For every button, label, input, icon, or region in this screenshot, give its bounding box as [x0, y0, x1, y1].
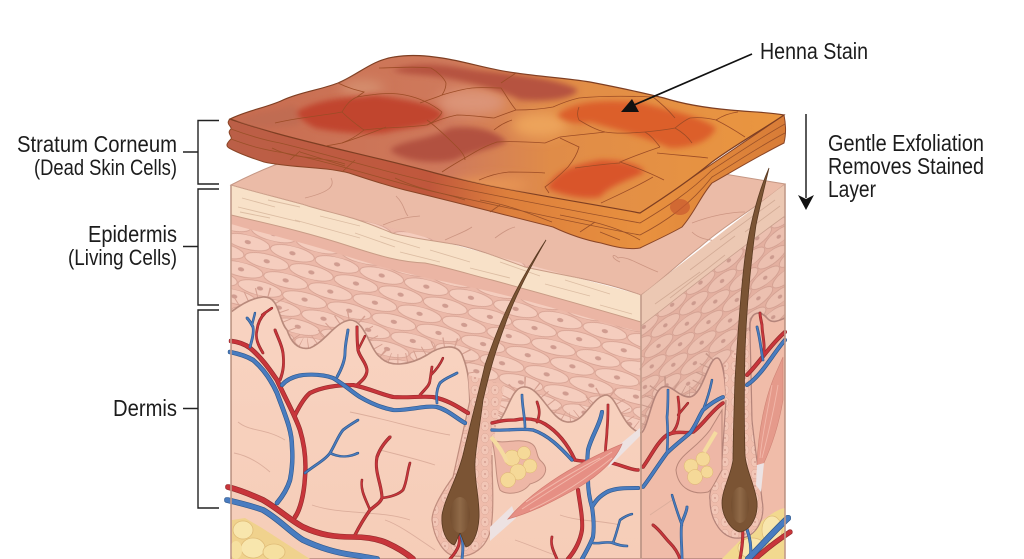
pink band under cream layer [231, 214, 641, 332]
sheet top surface [230, 55, 784, 213]
panel: henna stained stratum corneum sheet [227, 55, 785, 249]
hair shaft and bulb right [722, 168, 769, 532]
sebaceous gland left [491, 437, 546, 493]
cream stratum band [231, 185, 641, 322]
dermis left face [231, 297, 641, 559]
left face: epidermis [232, 186, 640, 432]
arrector muscle left [490, 428, 640, 541]
sheet edge layers [227, 115, 785, 249]
label: stratum corneum [17, 131, 177, 180]
stain blotches [236, 65, 716, 198]
label: gentle exfoliation: Removes Stained [828, 153, 984, 179]
bracket: epidermis [183, 189, 219, 305]
label: gentle exfoliation [828, 130, 984, 202]
red blood vessels [228, 308, 790, 559]
right face: epidermis [641, 185, 784, 432]
right cream band [641, 184, 785, 326]
label: epidermis: (Living Cells) [68, 245, 177, 270]
arrector muscle right [756, 357, 783, 492]
label: gentle exfoliation: Layer [828, 176, 876, 202]
darker edge patch [670, 199, 690, 215]
basal cell row left [231, 297, 641, 433]
label: gentle exfoliation: Gentle Exfoliation [828, 130, 984, 156]
cream band streaks [238, 198, 632, 314]
top surface of skin [231, 150, 785, 295]
basal cell row right [641, 358, 717, 433]
panel: skin block [227, 150, 790, 559]
layer lines [231, 124, 785, 240]
label: epidermis: Epidermis [88, 221, 177, 247]
sebaceous gland right [676, 410, 722, 493]
block outlines [231, 184, 785, 559]
right band streaks [655, 200, 780, 304]
follicle sheath right [710, 330, 763, 538]
label: dermis: Dermis [113, 395, 177, 421]
surface cracks [305, 178, 745, 272]
hair shaft and bulb left [442, 240, 546, 547]
bracket: dermis [183, 310, 219, 508]
label: henna stain: Henna Stain [760, 38, 868, 64]
bracket: stratum corneum [183, 120, 219, 184]
dermis fibres [234, 412, 672, 555]
right hair bulb highlight [731, 487, 749, 523]
fat right [722, 508, 785, 559]
arrow: henna stain pointer [621, 54, 752, 112]
arrow: exfoliation direction [798, 114, 814, 210]
label: epidermis [68, 221, 177, 270]
dermis right face [641, 313, 785, 559]
left hair bulb highlight [450, 497, 470, 533]
label: stratum corneum: Stratum Corneum [17, 131, 177, 157]
fat left [230, 518, 310, 559]
blue blood vessels [227, 313, 788, 559]
follicle sheath left [432, 375, 505, 556]
sheet surface cracks [275, 67, 745, 203]
label: stratum corneum: (Dead Skin Cells) [34, 155, 177, 180]
